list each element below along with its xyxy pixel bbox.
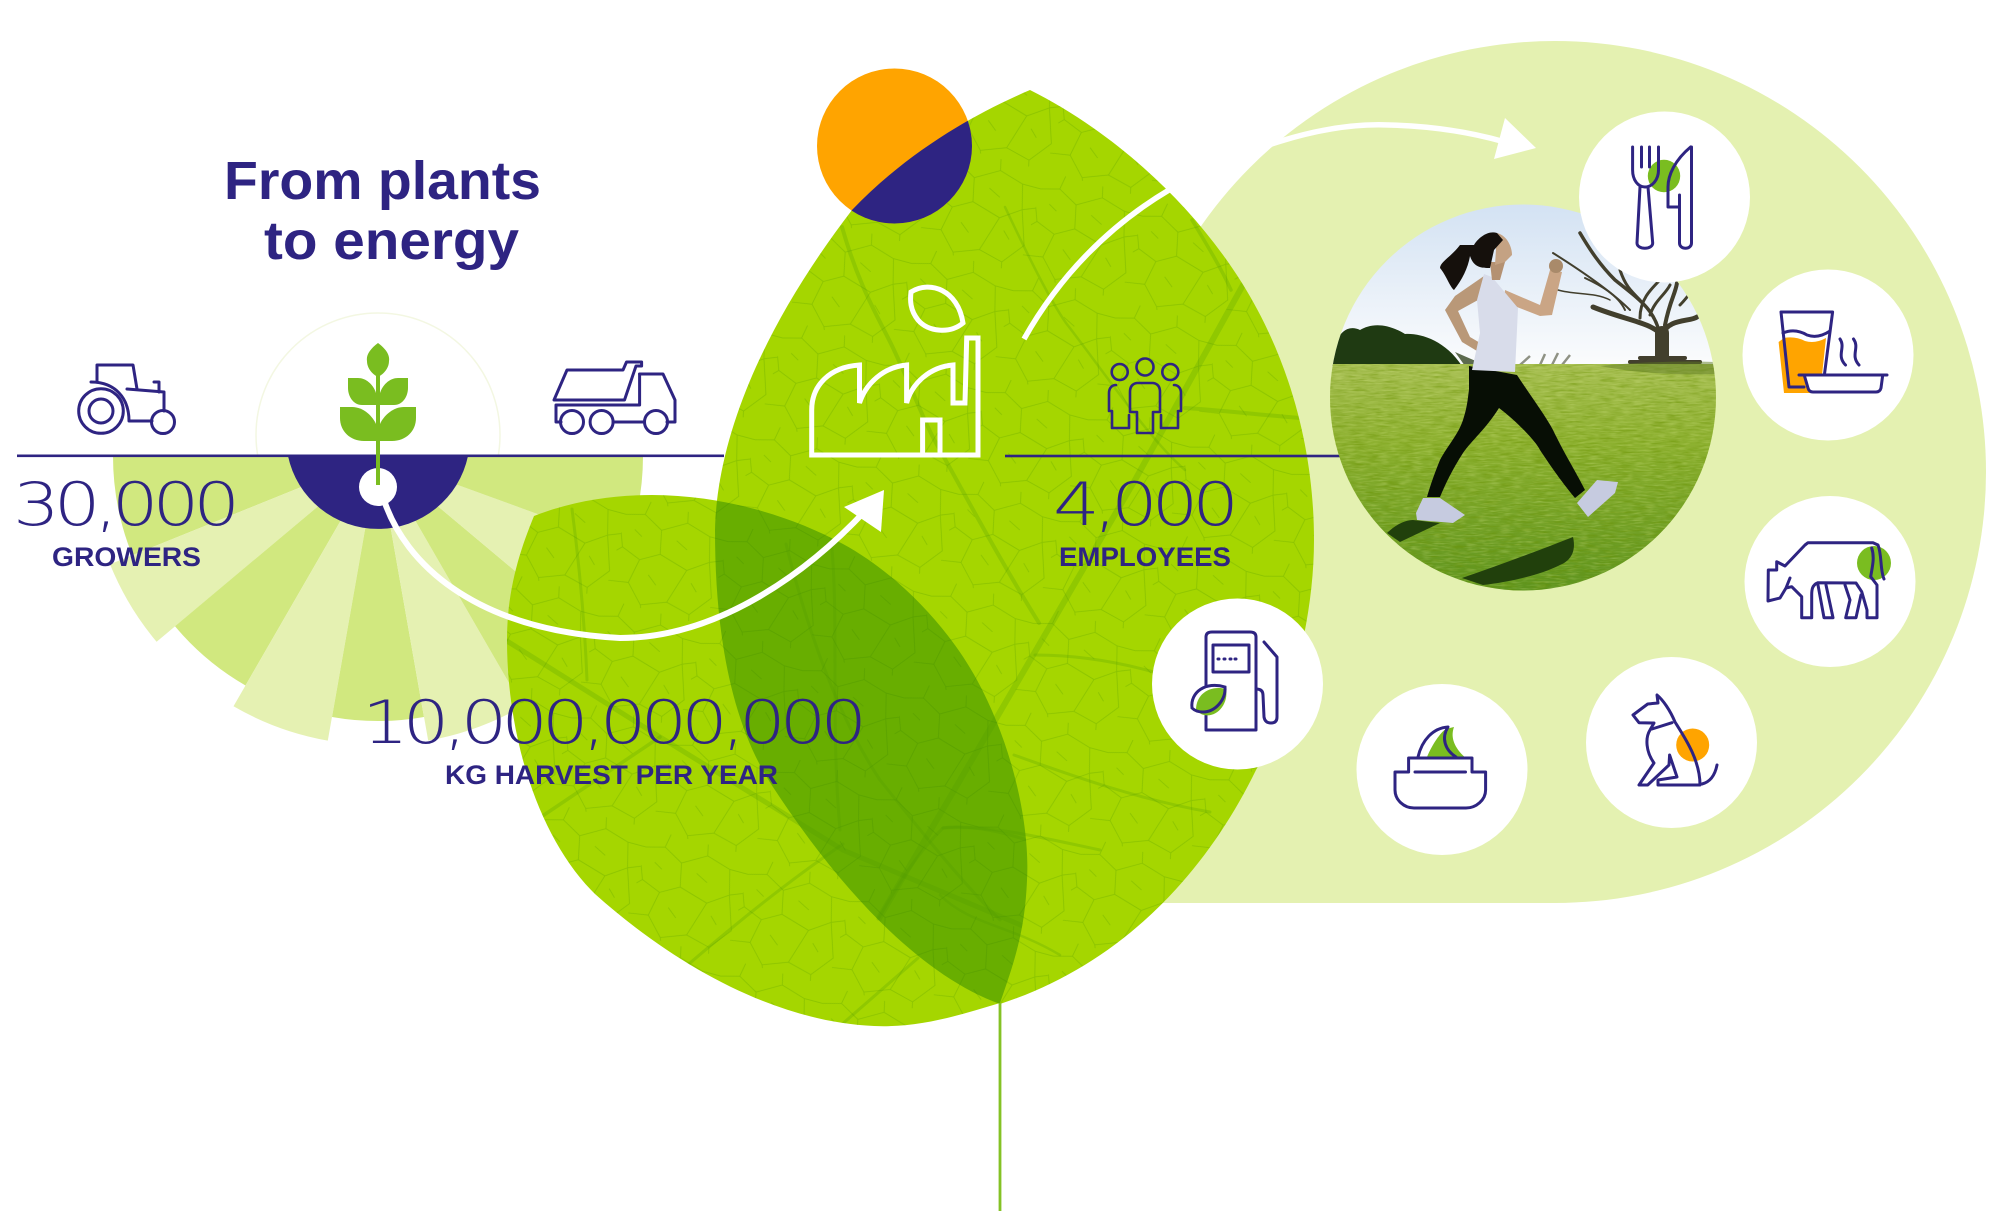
woman figure [1416, 232, 1618, 523]
lawn [1330, 364, 1716, 592]
orange and navy sun [817, 68, 972, 224]
icon: employees group [1109, 358, 1181, 433]
stat: employees: 4,000 [1053, 470, 1233, 540]
stat: harvest: 10,000,000,000 [362, 688, 861, 758]
callout: cream jar circle [1356, 684, 1528, 855]
callout: biofuel pump circle [1152, 598, 1323, 770]
second leaf [507, 495, 1027, 1026]
stat: harvest: KG HARVEST PER YEAR [445, 760, 778, 790]
main leaf [715, 90, 1314, 1004]
faint circle behind plant [256, 313, 500, 557]
tree in the distance [1553, 233, 1700, 362]
fan of harvest wedges [110, 456, 650, 741]
callout: cow circle [1744, 496, 1916, 667]
callout: dog circle [1586, 657, 1757, 828]
stat: harvest [362, 688, 861, 790]
callout: cutlery circle [1579, 112, 1750, 282]
icon: plant sprout [340, 343, 416, 506]
ground line right [1005, 455, 1340, 457]
veins of second leaf [500, 480, 1040, 1040]
stat: employees: EMPLOYEES [1059, 542, 1231, 572]
veins of main leaf [700, 80, 1330, 1020]
stat: growers [13, 470, 234, 572]
distant hedge [1330, 325, 1462, 366]
shrubs on horizon [1520, 353, 1570, 365]
title: to energy [264, 211, 519, 271]
title [224, 151, 541, 271]
arrow: plants to factory [385, 490, 884, 638]
stat: growers: GROWERS [52, 542, 201, 572]
stat: employees [1053, 470, 1233, 572]
icon: tractor [79, 365, 174, 434]
navy soil semicircle [288, 456, 468, 529]
icon: factory with leaf [812, 287, 978, 455]
title: From plants [224, 151, 541, 211]
icon: dump truck [554, 362, 675, 434]
leaf overlap [715, 500, 1028, 1004]
shadows on grass [1387, 520, 1440, 542]
stat: growers: 30,000 [13, 470, 234, 540]
ground line left [17, 454, 724, 457]
stem of main leaf [999, 1003, 1001, 1211]
photo: woman walking in a park [1330, 204, 1716, 592]
arrow: factory to products [1024, 118, 1536, 339]
light green droplet panel [1124, 41, 1986, 903]
callout: drink and meal circle [1742, 270, 1914, 440]
